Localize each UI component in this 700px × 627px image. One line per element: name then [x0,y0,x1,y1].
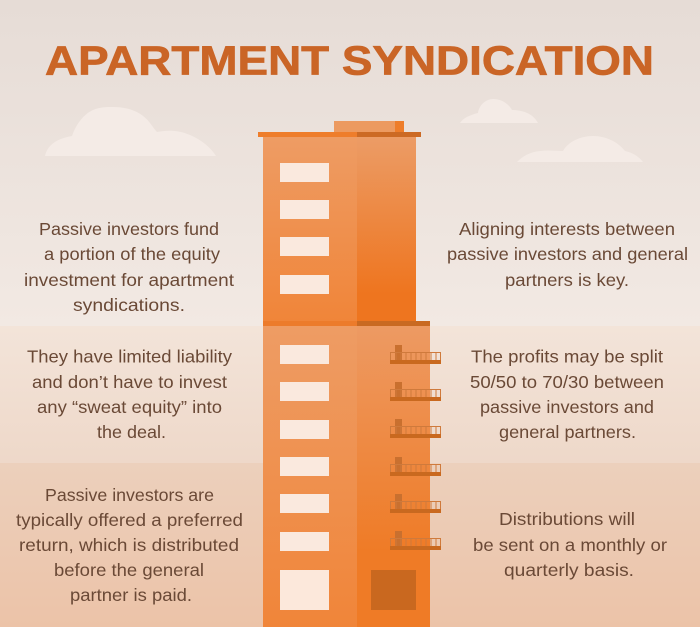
text block: preferred return: partner is paid. [70,585,192,605]
icon: wide cloud right [517,136,643,162]
upper tower [263,137,416,321]
text block: preferred return [16,485,243,605]
text block: aligning interests: passive investors and general [447,244,688,264]
text block: profit split: 50/50 to 70/30 between [470,372,664,392]
text block: passive investors fund [24,219,234,315]
text block: preferred return: before the general [54,560,204,580]
text block: aligning interests: partners is key. [505,270,629,290]
roof [258,132,421,137]
text block: distributions: quarterly basis. [504,560,634,580]
text block: aligning interests: Aligning interests between [459,219,675,239]
ledge [263,321,430,326]
windows [280,163,329,551]
penthouse [334,121,404,132]
icon: large cloud left [45,107,216,156]
text block: passive investors fund: Passive investors fund [39,219,219,239]
entrance window [280,570,329,610]
lower tower [263,326,430,627]
text block: distributions: be sent on a monthly or [473,535,667,555]
text block: passive investors fund: a portion of the equity [44,244,220,264]
text block: limited liability: and don’t have to invest [32,372,227,392]
entrance door [371,570,416,610]
text block: preferred return: return, which is distributed [19,535,239,555]
text block: preferred return: Passive investors are [45,485,214,505]
icon: small cloud right [460,99,538,123]
text block: limited liability: They have limited liability [27,346,232,366]
text block: profit split: general partners. [499,422,636,442]
text block: distributions: Distributions will [499,509,635,529]
text block: preferred return: typically offered a preferred [16,510,243,530]
title: APARTMENT SYNDICATION [45,38,654,84]
text block: profit split: passive investors and [480,397,654,417]
text block: profit split: The profits may be split [471,346,663,366]
balconies [390,345,441,550]
text block: limited liability [27,346,232,442]
text block: limited liability: any “sweat equity” into [37,397,222,417]
text block: passive investors fund: syndications. [73,295,185,315]
text block: distributions [473,509,667,580]
apartment building [258,121,441,627]
text block: passive investors fund: investment for apartment [24,270,234,290]
text block: limited liability: the deal. [97,422,166,442]
text block: profit split [470,346,664,442]
text block: aligning interests [447,219,688,290]
